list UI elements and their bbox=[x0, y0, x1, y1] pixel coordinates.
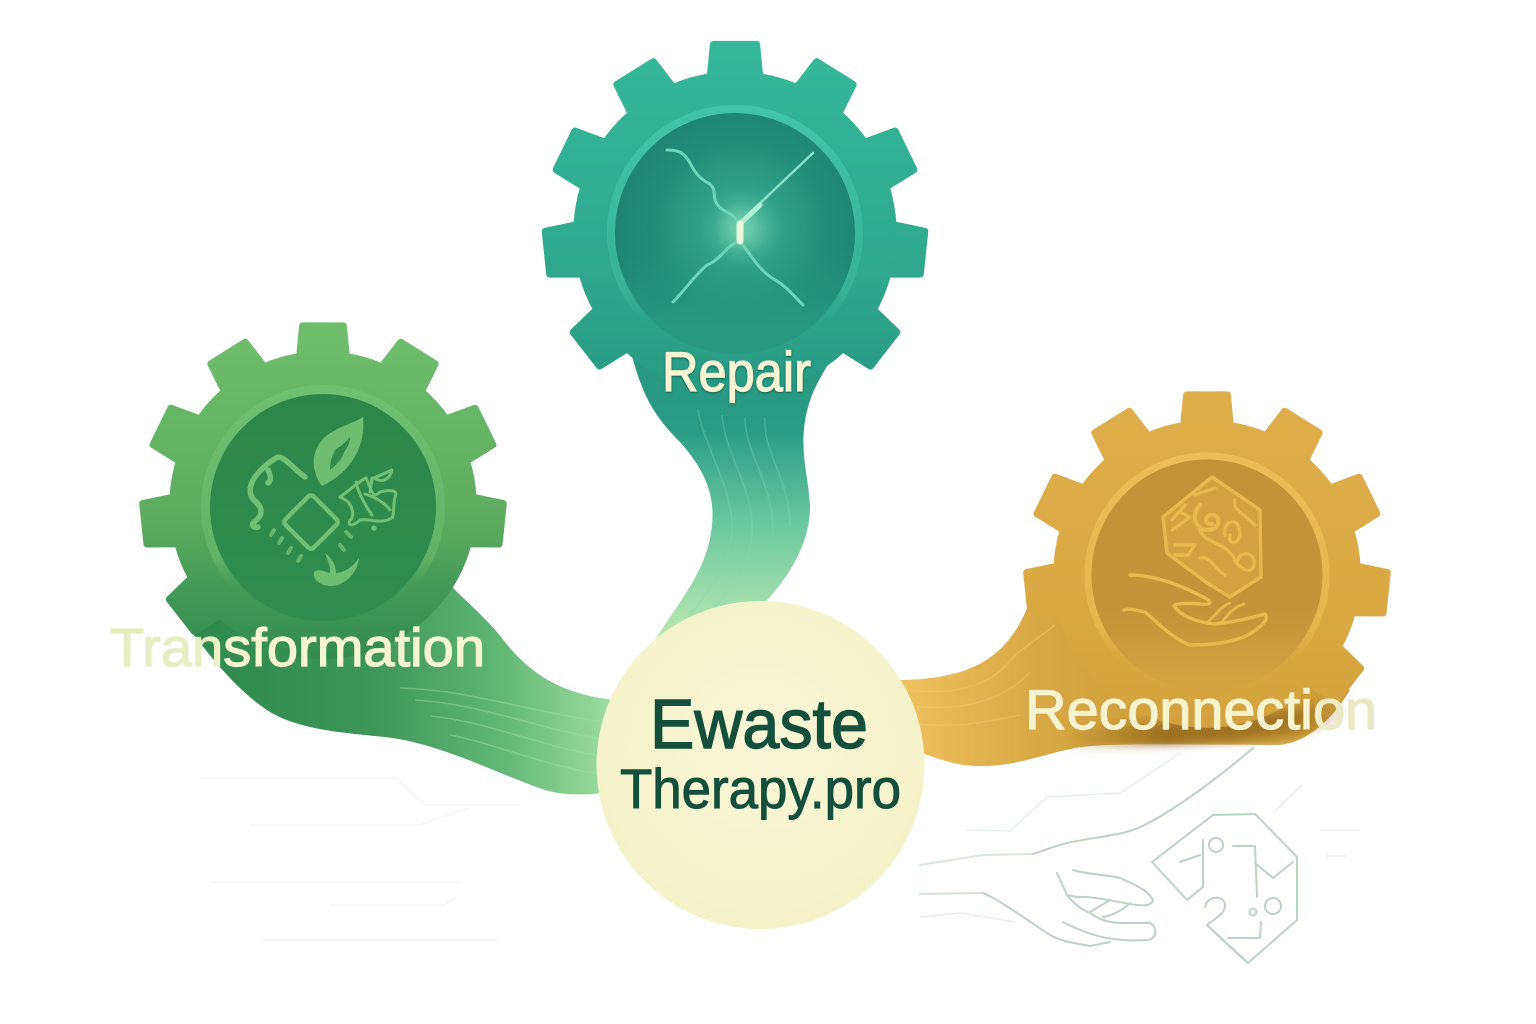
gear body: transformation bbox=[143, 326, 503, 655]
gear: reconnection bbox=[1025, 395, 1387, 741]
connector stream: repair to hub bbox=[628, 335, 845, 640]
circuit trace bbox=[250, 457, 305, 527]
gear body: reconnection bbox=[1027, 395, 1387, 724]
inner disc: reconnection bbox=[1091, 459, 1323, 691]
background sketch: faint circuit lines left bbox=[200, 778, 520, 940]
inner disc: transformation bbox=[209, 393, 437, 621]
background sketch: hand and circuit fragment bbox=[920, 748, 1360, 963]
title line 2: Therapy.pro bbox=[620, 757, 901, 820]
ring: transformation bbox=[206, 390, 440, 624]
chip pins bbox=[271, 530, 351, 561]
ring: repair bbox=[611, 109, 859, 357]
hand bbox=[1124, 575, 1266, 645]
leaf bbox=[314, 417, 363, 486]
central hub bbox=[596, 601, 924, 929]
disc fade: repair bbox=[614, 112, 856, 354]
hook bbox=[314, 553, 359, 586]
hub circle bbox=[596, 601, 924, 929]
gear: transformation bbox=[110, 326, 503, 678]
icon: chip, leaf and plant bbox=[250, 417, 396, 586]
chip bbox=[283, 494, 339, 550]
label: Transformation: Transformation bbox=[110, 618, 485, 678]
label: Reconnection: Reconnection bbox=[1025, 678, 1377, 741]
title line 1: Ewaste bbox=[650, 685, 868, 763]
plant bbox=[340, 470, 396, 525]
label: Repair: Repair bbox=[662, 340, 811, 403]
gear: repair bbox=[545, 45, 925, 403]
carved stone bbox=[1163, 477, 1261, 597]
inner disc: repair bbox=[615, 113, 855, 353]
ring: reconnection bbox=[1088, 456, 1326, 694]
icon: glowing crack bbox=[667, 150, 813, 305]
icon: hand holding carved stone bbox=[1124, 477, 1266, 645]
connector stream: transformation to hub bbox=[175, 560, 615, 794]
connector stream: reconnection to hub bbox=[895, 600, 1400, 790]
gear body: repair bbox=[545, 45, 925, 391]
